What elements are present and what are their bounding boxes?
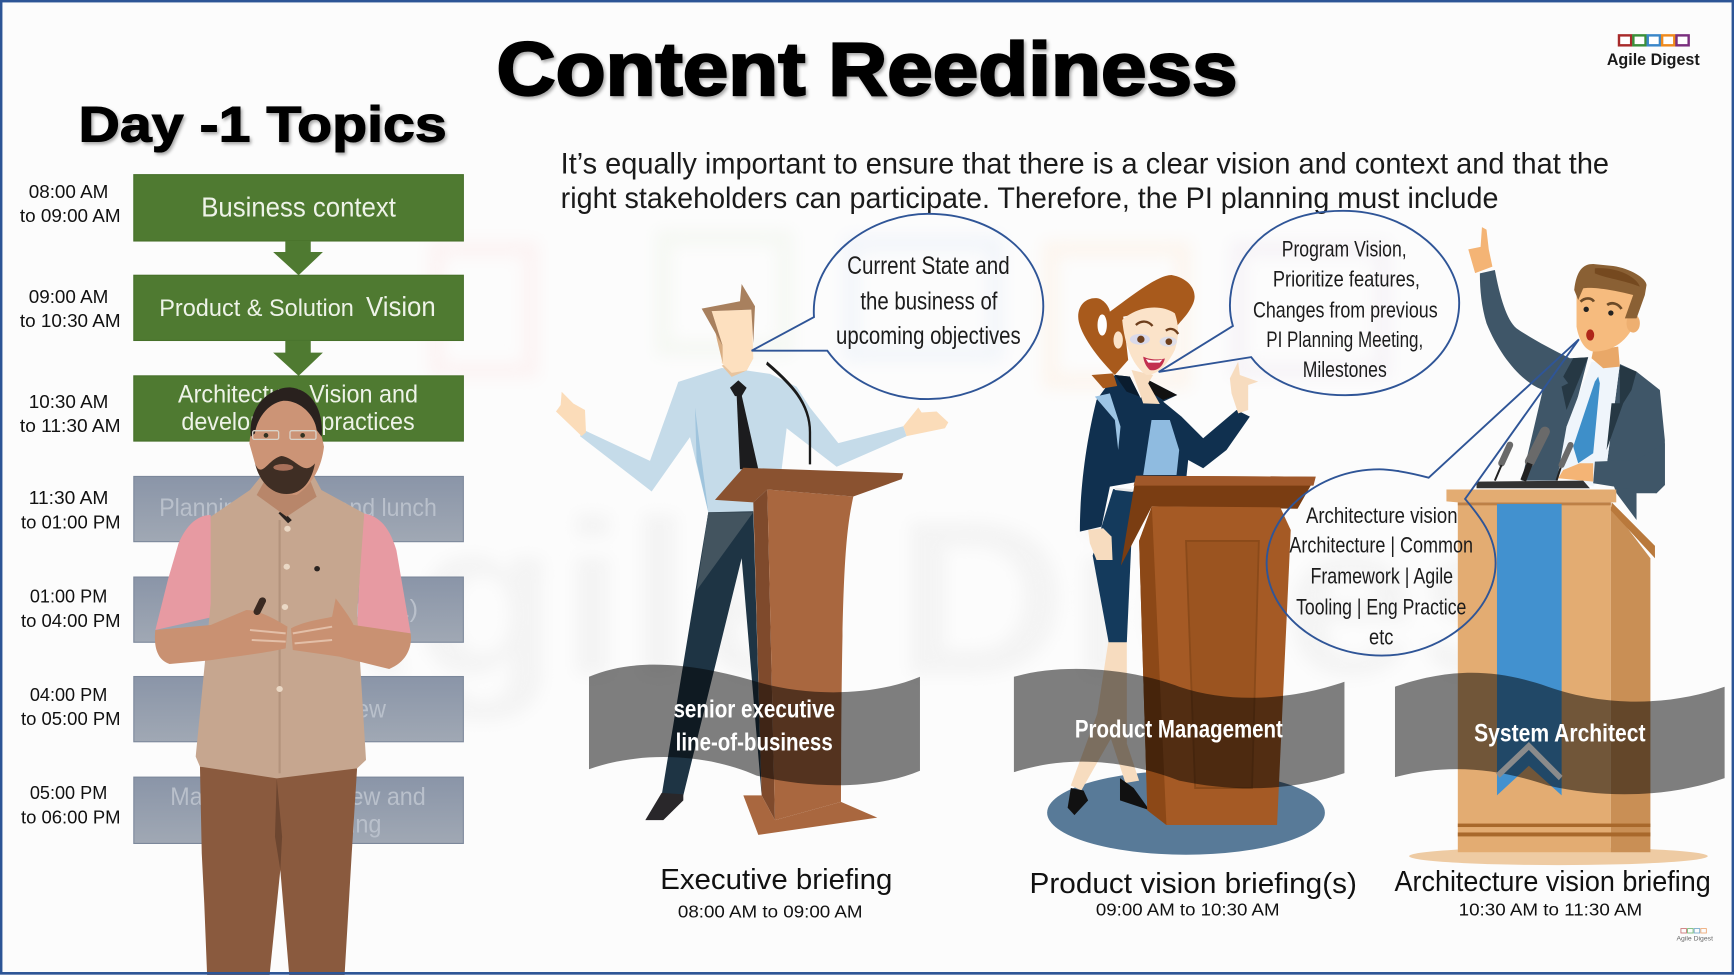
agenda time labels	[20, 181, 121, 828]
box: Architecture Vision: development practices	[181, 408, 415, 436]
bubble text: executive: upcoming objectives	[836, 322, 1021, 350]
presenter	[155, 387, 411, 975]
banner text: senior executive: senior executive	[673, 695, 835, 723]
architect banner	[1395, 673, 1725, 794]
bubble text: product: Program Vision,	[1282, 236, 1407, 261]
bubble text: architect	[1289, 503, 1473, 649]
intro paragraph: It’s equally important to ensure that there is a clear vision and context and that the	[561, 148, 1609, 181]
executive speech bubble	[752, 214, 1043, 399]
caption: Executive briefing: Executive briefing	[660, 864, 892, 896]
agenda time labels: to 04:00 PM	[21, 610, 121, 631]
bubble text: product: PI Planning Meeting,	[1266, 327, 1423, 352]
box: Architecture Vision: Architecture Vision and	[178, 380, 418, 408]
executive banner	[589, 665, 920, 785]
bubble text: executive: the business of	[860, 288, 998, 316]
agenda time labels: 10:30 AM	[29, 391, 108, 412]
woman legs and skirt	[1071, 640, 1139, 790]
box: Management review: Management review and	[170, 783, 426, 811]
arrow: product to architecture	[273, 340, 323, 376]
banner text: Product Management: Product Management	[1075, 715, 1283, 743]
box: Draft plan review	[134, 677, 463, 742]
agenda boxes	[134, 175, 463, 843]
box: Management review: problem-solving	[216, 810, 382, 838]
box: Product and Solution Vision	[134, 275, 463, 340]
agenda time labels: 04:00 PM	[30, 684, 107, 705]
heading: Day -1 Topics: Day -1 Topics	[79, 97, 447, 152]
watermark background: Agile Digest	[238, 474, 1631, 721]
box: Team breakouts	[134, 577, 463, 642]
microphones	[1502, 445, 1510, 463]
box: Business context: Business context	[201, 192, 396, 223]
architect arm and jacket	[1480, 270, 1570, 390]
woman podium	[1121, 476, 1316, 566]
executive shirt and arms	[580, 368, 907, 512]
woman hair and face	[1078, 275, 1195, 375]
woman jacket	[1080, 375, 1187, 532]
blue ribbon	[1497, 504, 1562, 795]
banner text: senior executive: line-of-business	[676, 729, 833, 757]
title: Content Reediness	[497, 27, 1237, 111]
caption: Product vision briefing	[1030, 868, 1357, 919]
agenda time labels: to 09:00 AM	[20, 205, 121, 226]
box: Planning context and lunch: Planning context and lunch	[159, 494, 437, 522]
small logo watermark: Agile Digest	[1676, 936, 1713, 943]
box: Planning context and lunch	[134, 476, 463, 542]
caption: Architecture vision briefing: 10:30 AM to 11:30 AM	[1459, 899, 1642, 919]
caption: Executive briefing: 08:00 AM to 09:00 AM	[678, 902, 863, 922]
bubble text: architect: Architecture | Common	[1289, 533, 1473, 558]
bubble text: executive	[836, 252, 1021, 350]
box: Product and Solution Vision: Vision	[366, 291, 436, 322]
executive podium	[753, 490, 775, 820]
agenda time labels: 05:00 PM	[30, 782, 107, 803]
arrow: business to product	[273, 241, 323, 275]
small logo watermark	[1676, 929, 1713, 943]
bubble text: architect: Tooling | Eng Practice	[1296, 595, 1466, 620]
caption: Product vision briefing: 09:00 AM to 10:30 AM	[1096, 899, 1279, 919]
caption: Product vision briefing: Product vision briefing(s)	[1030, 868, 1357, 900]
agenda time labels: 11:30 AM	[29, 487, 108, 508]
box: Business context	[134, 175, 463, 241]
caption: Executive briefing	[660, 864, 892, 922]
agenda time labels: to 05:00 PM	[21, 708, 121, 729]
banner text: System Architect: System Architect	[1474, 720, 1646, 748]
product banner	[1014, 669, 1344, 788]
watermark background	[238, 238, 1631, 721]
intro paragraph: right stakeholders can participate. Therefore, the PI planning must include	[561, 182, 1498, 215]
bubble text: architect: etc	[1369, 624, 1393, 649]
bubble text: product	[1253, 236, 1438, 382]
agenda time labels: to 06:00 PM	[21, 807, 121, 828]
agenda time labels: 09:00 AM	[29, 286, 108, 307]
architect podium	[1458, 502, 1611, 852]
bubble text: product: Milestones	[1303, 357, 1387, 382]
agenda time labels: to 10:30 AM	[20, 310, 121, 331]
agenda time labels: 01:00 PM	[30, 585, 107, 606]
banner text: senior executive	[673, 695, 835, 757]
product speech bubble	[1159, 211, 1459, 395]
caption: Architecture vision briefing	[1394, 866, 1711, 919]
bubble text: architect: Architecture vision	[1306, 503, 1458, 528]
agenda time labels: 08:00 AM	[29, 181, 108, 202]
figure: product manager	[1014, 211, 1459, 855]
box: Architecture Vision	[134, 376, 463, 441]
figure: system architect	[1267, 227, 1725, 865]
caption: Architecture vision briefing: Architecture vision briefing	[1394, 866, 1711, 898]
logo: Agile Digest	[1607, 35, 1700, 69]
bubble text: executive: Current State and	[847, 252, 1010, 280]
logo: Agile Digest: Agile Digest	[1607, 50, 1700, 69]
architect head	[1592, 347, 1620, 368]
bubble text: product: Changes from previous	[1253, 297, 1438, 322]
box: Draft plan review: Draft plan review	[210, 695, 387, 723]
agenda time labels: to 11:30 AM	[20, 415, 121, 436]
box: Team breakouts: Team breakouts (1)	[200, 595, 418, 623]
box: Product and Solution Vision: Product & Solution	[159, 295, 354, 322]
architect speech bubble	[1267, 339, 1579, 656]
bubble text: product: Prioritize features,	[1273, 266, 1420, 291]
woman raised hand	[1230, 362, 1258, 413]
agenda time labels: to 01:00 PM	[21, 511, 121, 532]
figure: senior executive	[556, 214, 1043, 835]
intro paragraph	[561, 148, 1609, 215]
bubble text: architect: Framework | Agile	[1310, 564, 1453, 589]
box: Management review	[134, 777, 463, 843]
